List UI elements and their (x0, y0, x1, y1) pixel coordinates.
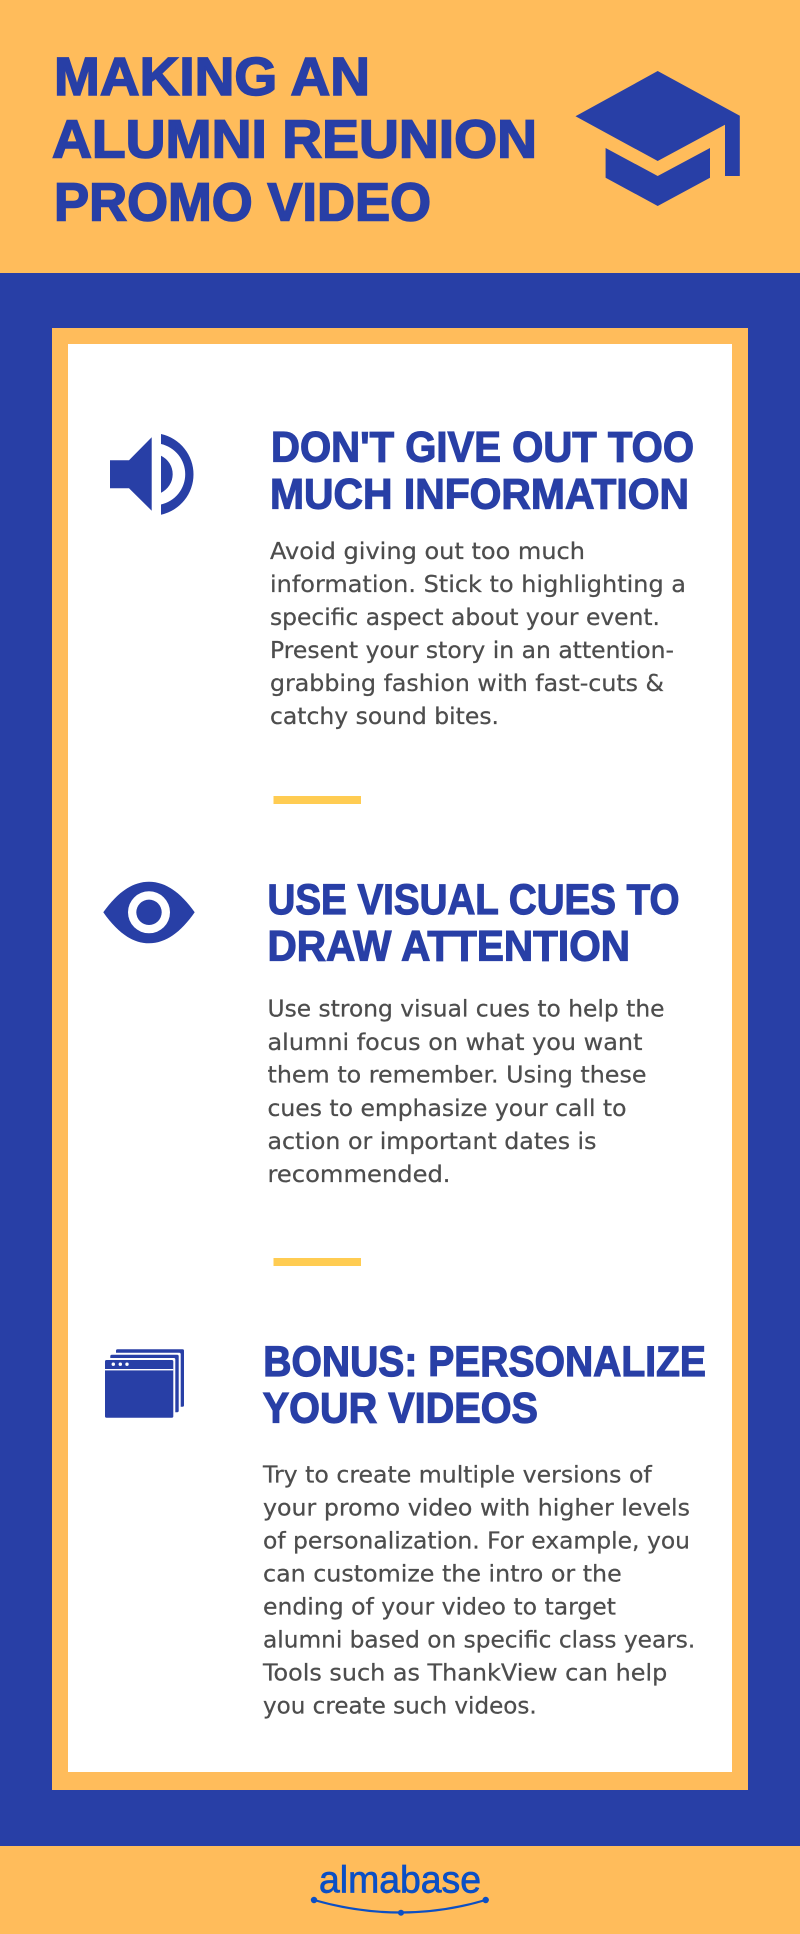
text block: grabbing fashion with fast-cuts & (270, 669, 664, 697)
logo: almabase (311, 1860, 489, 1916)
text block: information. Stick to highlighting a (270, 570, 686, 598)
heading: DRAW ATTENTION (268, 923, 630, 971)
icon: stacked browser windows (103, 1349, 184, 1419)
heading: DON'T GIVE OUT TOO (271, 424, 694, 472)
panel: main card (52, 328, 748, 1790)
text block: ending of your video to target (263, 1593, 616, 1621)
heading: YOUR VIDEOS (263, 1385, 538, 1433)
heading: MUCH INFORMATION (270, 470, 689, 518)
heading (270, 424, 694, 518)
heading: USE VISUAL CUES TO (268, 876, 680, 924)
text block: Use strong visual cues to help the (268, 995, 664, 1023)
text block: catchy sound bites. (270, 702, 499, 730)
text block (270, 537, 686, 730)
title: ALUMNI REUNION (52, 110, 537, 170)
header band (0, 0, 800, 273)
text block: Try to create multiple versions of (262, 1461, 652, 1489)
text block: Avoid giving out too much (270, 537, 585, 565)
icon: speaker (110, 434, 193, 515)
icon: eye (103, 882, 195, 943)
text block: can customize the intro or the (263, 1560, 622, 1588)
text block: action or important dates is (268, 1127, 596, 1155)
section: too much information (110, 424, 694, 730)
text block: cues to emphasize your call to (268, 1094, 626, 1122)
title (52, 47, 537, 232)
text block: your promo video with higher levels (263, 1494, 690, 1522)
text block: alumni based on specific class years. (263, 1626, 695, 1654)
text block: alumni focus on what you want (268, 1028, 642, 1056)
text block: of personalization. For example, you (263, 1527, 690, 1555)
text block (262, 1461, 695, 1720)
section: visual cues (103, 876, 680, 1188)
text block: you create such videos. (263, 1692, 537, 1720)
section: personalize (103, 1338, 706, 1720)
text block: recommended. (268, 1160, 450, 1188)
icon: graduation cap (576, 71, 740, 206)
logo: almabase: almabase (319, 1860, 481, 1902)
footer band (0, 1846, 800, 1934)
text block: Present your story in an attention- (270, 636, 674, 664)
heading: BONUS: PERSONALIZE (263, 1338, 706, 1386)
text block (268, 995, 664, 1188)
heading (263, 1338, 706, 1433)
title: PROMO VIDEO (54, 172, 431, 232)
text block: Tools such as ThankView can help (262, 1659, 667, 1687)
text block: them to remember. Using these (268, 1061, 646, 1089)
text block: specific aspect about your event. (270, 603, 660, 631)
heading (268, 876, 680, 971)
title: MAKING AN (54, 47, 370, 107)
